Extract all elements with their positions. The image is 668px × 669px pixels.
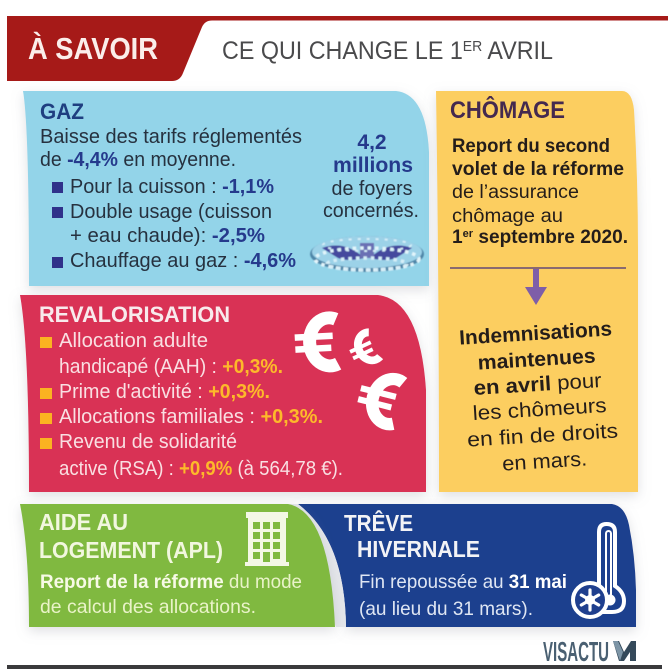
revalorisation list: Revenu de solidarité	[59, 431, 237, 453]
chômage indemnisation text: les chômeurs	[472, 394, 607, 425]
gaz intro text: Baisse des tarifs réglementés	[40, 125, 302, 148]
green gap and background	[286, 504, 346, 627]
subtitle: CE QUI CHANGE LE 1	[222, 37, 480, 65]
chômage report text: septembre 2020.	[473, 227, 628, 248]
footer bar	[7, 665, 662, 669]
title tab: à savoir: À SAVOIR	[28, 31, 158, 66]
chômage indemnisation text	[459, 317, 619, 476]
gaz heading: GAZ	[40, 99, 84, 124]
apl heading: AIDE AU	[39, 509, 128, 535]
chômage background	[436, 91, 638, 492]
gaz intro text	[40, 125, 302, 171]
icon: euro coins	[294, 318, 404, 425]
revalorisation list: Allocations familiales : +0,3%.	[59, 406, 323, 428]
chômage indemnisation text: en avril pour	[473, 369, 602, 400]
gaz tariff list: Pour la cuisson : -1,1%	[70, 175, 274, 198]
gaz intro text: de -4,4% en moyenne.	[40, 148, 236, 171]
revalorisation heading: REVALORISATION	[39, 302, 230, 327]
revalorisation background	[20, 295, 426, 492]
panel: trêve hivernale	[298, 504, 636, 627]
households figure: millions	[333, 154, 413, 177]
chômage report text: de l’assurance	[452, 182, 579, 203]
chômage report text: volet de la réforme	[452, 159, 624, 180]
apl text: de calcul des allocations.	[40, 596, 256, 618]
revalorisation list: handicapé (AAH) : +0,3%.	[59, 356, 283, 378]
subtitle: ER	[463, 38, 482, 55]
revalorisation list	[40, 330, 343, 480]
panel: chômage	[436, 91, 638, 492]
households figure	[323, 131, 419, 222]
trêve heading	[344, 509, 480, 562]
chômage report text: Report du second	[452, 136, 610, 157]
chômage report text: er	[463, 228, 474, 240]
revalorisation list: Allocation adulte	[59, 330, 208, 352]
chômage indemnisation text: Indemnisations	[459, 317, 613, 350]
subtitle: AVRIL	[482, 37, 553, 65]
revalorisation list: Prime d'activité : +0,3%.	[59, 381, 270, 403]
arrow	[525, 269, 547, 305]
gaz tariff list: Double usage (cuisson	[70, 200, 272, 223]
trêve text	[359, 571, 567, 620]
trêve heading: HIVERNALE	[357, 536, 480, 562]
apl text: Report de la réforme du mode	[40, 571, 302, 593]
chômage heading: CHÔMAGE	[450, 96, 565, 124]
apl heading	[39, 509, 223, 563]
panel: gaz	[23, 91, 429, 286]
apl heading: LOGEMENT (APL)	[39, 537, 223, 563]
chômage indemnisation text: en mars.	[501, 447, 588, 476]
logo: visactu: VISACTU	[543, 636, 609, 667]
icon: thermometer	[573, 524, 624, 617]
households figure: de foyers	[332, 178, 412, 200]
icon: gas burner	[310, 236, 424, 272]
gaz tariff list	[52, 175, 296, 272]
header	[7, 16, 668, 81]
households figure: 4,2	[357, 131, 387, 154]
apl text	[40, 571, 302, 618]
chômage report text: 1	[452, 227, 463, 248]
chômage report text	[452, 136, 628, 248]
gaz background	[23, 91, 429, 286]
trêve text: (au lieu du 31 mars).	[359, 598, 533, 620]
icon: building	[245, 512, 289, 566]
households figure: concernés.	[323, 200, 419, 222]
gaz tariff list: + eau chaude): -2,5%	[70, 224, 265, 247]
panel: revalorisation	[20, 295, 426, 492]
trêve background	[298, 504, 636, 627]
chômage indemnisation text: maintenues	[477, 344, 596, 375]
chômage indemnisation text: en fin de droits	[467, 419, 619, 452]
header band	[7, 16, 668, 81]
trêve text: Fin repoussée au 31 mai	[359, 571, 567, 593]
revalorisation list: active (RSA) : +0,9% (à 564,78 €).	[59, 458, 343, 480]
chômage report text: chômage au	[452, 206, 563, 227]
trêve heading: TRÊVE	[344, 509, 413, 536]
panel: aide au logement	[20, 504, 346, 627]
gaz tariff list: Chauffage au gaz : -4,6%	[70, 249, 296, 272]
